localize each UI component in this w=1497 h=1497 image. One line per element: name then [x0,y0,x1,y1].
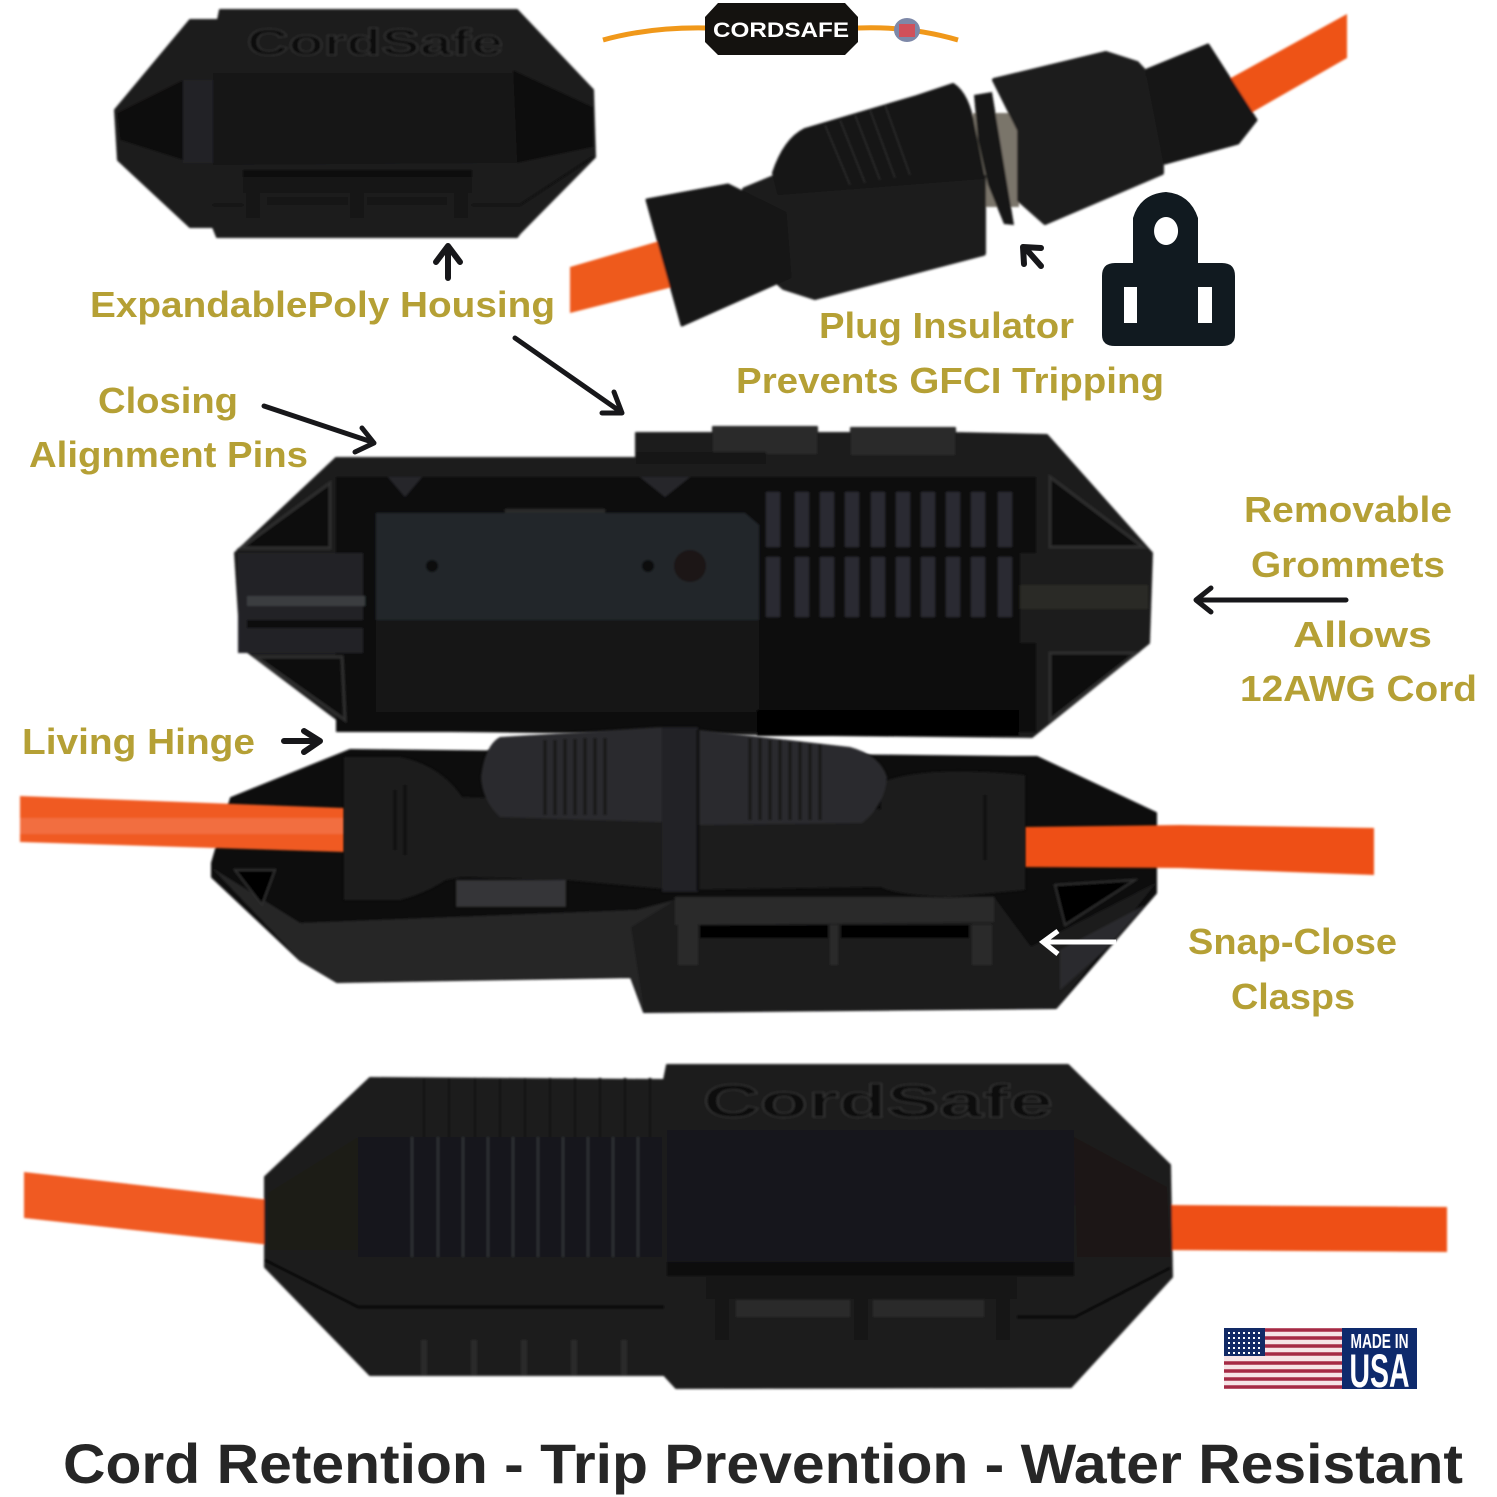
plug in case [344,727,1025,907]
label: Snap-Close Clasps [1188,921,1397,1017]
logo: CordSafe badge [603,3,958,55]
label: Snap-Close Clasps: Clasps [1231,976,1355,1017]
arrow: to grommet [1196,588,1346,612]
label: Allows 12AWG Cord: Allows [1293,614,1432,655]
badge: made in USA flag [1224,1328,1417,1397]
lower half of case [212,750,1156,1012]
upper half of case [235,427,1152,737]
photo: closed case with cord: CordSafe [703,1075,1053,1127]
label: Closing Alignment Pins: Closing [98,380,238,421]
label: ExpandablePoly Housing: ExpandablePoly Housing [90,284,555,325]
label: Closing Alignment Pins [29,380,308,475]
photo: plug and socket with orange cord [570,14,1347,325]
label: Closing Alignment Pins: Alignment Pins [29,434,308,475]
arrow: to alignment pins [264,406,374,452]
label: Removable Grommets: Grommets [1251,544,1445,585]
label: Prevents GFCI Tripping: Prevents GFCI Tripping [736,360,1164,401]
label: Living Hinge: Living Hinge [22,721,255,762]
logo: CordSafe badge: CORDSAFE [713,19,849,42]
arrow: to housing clasp [436,246,460,278]
plug insulator disc and prongs [973,113,1019,207]
arrow: to insulator [1023,247,1041,266]
right plug [994,53,1162,223]
photo: open case with cord [20,427,1374,1012]
photo: closed housing top view: CordSafe [247,22,503,63]
arrow: living hinge [284,731,320,752]
arrow: to clasps [1043,931,1116,954]
label: Allows 12AWG Cord [1240,614,1477,709]
label: Snap-Close Clasps: Snap-Close [1188,921,1397,962]
label: Removable Grommets: Removable [1244,489,1452,530]
footer title: Cord Retention - Trip Prevention - Water Resistant [63,1432,1463,1495]
icon: plug insulator [1102,192,1235,346]
orange cords [20,796,1374,875]
grommet channels [238,553,363,653]
photo: closed case with cord [24,1065,1447,1388]
ribs [773,492,1005,617]
arrow: housing to open case [515,338,622,413]
badge: made in USA flag: MADE IN [1350,1331,1408,1353]
label: Plug Insulator: Plug Insulator [819,305,1074,346]
label: Removable Grommets [1244,489,1452,585]
badge: made in USA flag: USA [1350,1344,1410,1397]
photo: closed housing top view [115,10,595,237]
label: Allows 12AWG Cord: 12AWG Cord [1240,668,1477,709]
left plug [745,177,983,297]
